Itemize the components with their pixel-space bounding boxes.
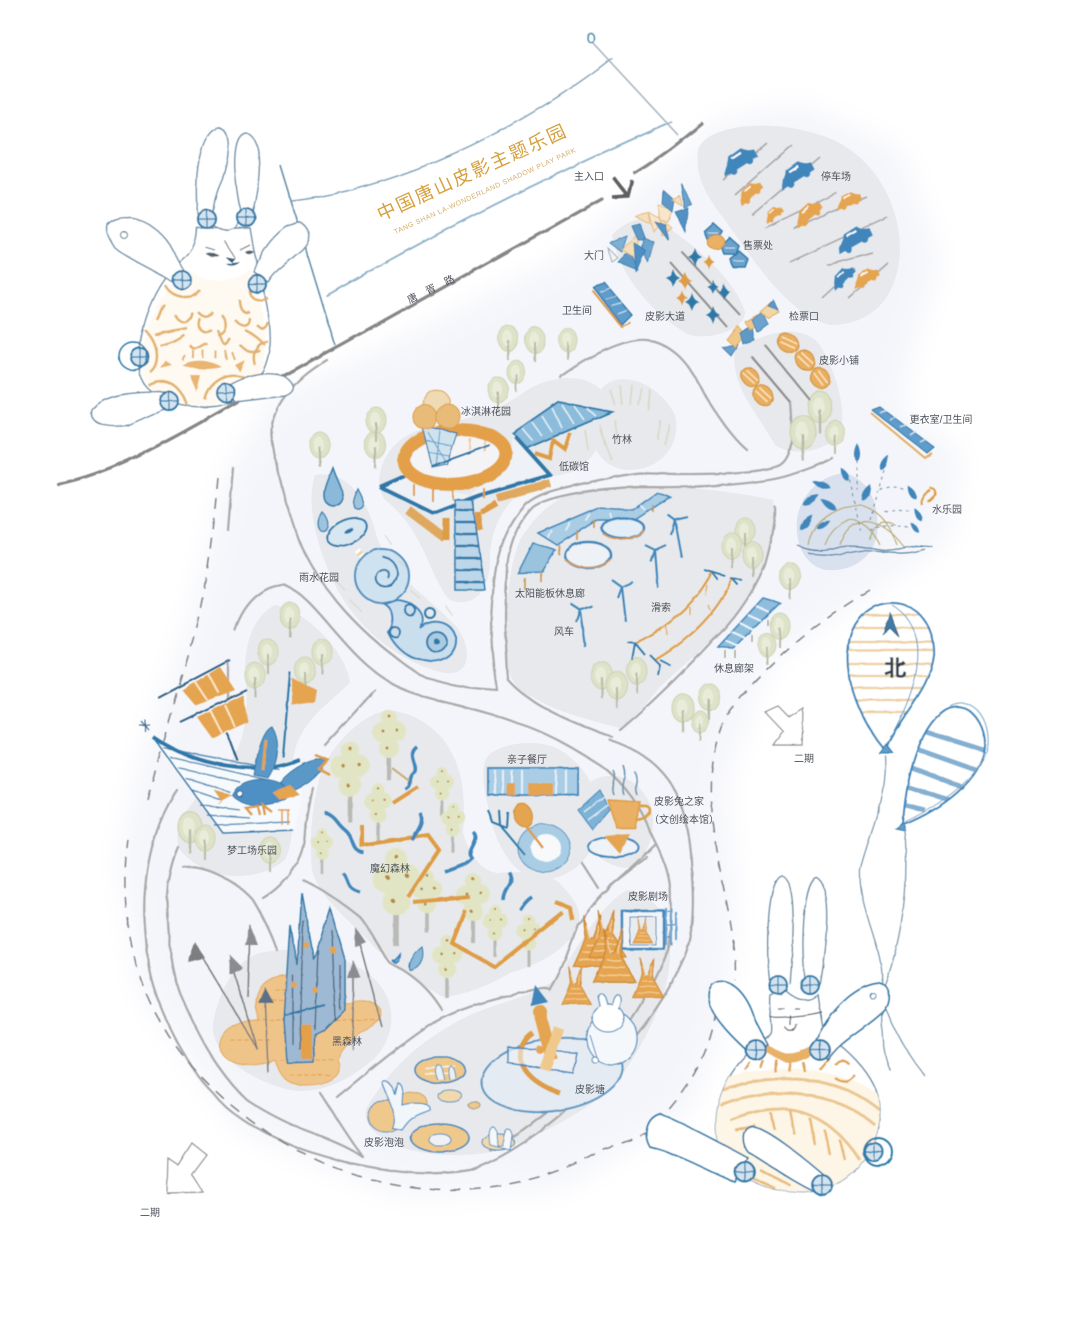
arms bbox=[709, 981, 768, 1055]
icon: rest pavilion bbox=[718, 598, 780, 658]
orange trail bbox=[362, 787, 572, 967]
zone: bubble pond bbox=[366, 890, 670, 1155]
balloon: north compass bbox=[840, 603, 940, 753]
arms bbox=[107, 218, 188, 282]
icon: souvenir shops bbox=[737, 330, 833, 409]
phase-two dashed boundary bbox=[125, 478, 870, 1190]
icon: toilet block bbox=[593, 282, 632, 327]
orange bunnies bbox=[573, 915, 614, 966]
label: souvenir shop: 皮影小铺 bbox=[819, 354, 859, 367]
icon: family restaurant bbox=[488, 768, 578, 872]
legs bbox=[646, 1114, 748, 1182]
joints bbox=[198, 210, 216, 228]
zone: bunny home bbox=[581, 776, 653, 868]
stairs bbox=[455, 500, 485, 590]
icon: bamboo grove bbox=[585, 385, 670, 460]
body bbox=[139, 228, 270, 407]
joints bbox=[769, 976, 787, 994]
label: water park: 水乐园 bbox=[932, 504, 962, 516]
balloon: striped bbox=[896, 703, 990, 831]
label: pavilion: 休息廊架 bbox=[714, 662, 754, 675]
rabbit top-left bbox=[92, 128, 309, 426]
face bbox=[205, 240, 250, 258]
scoops bbox=[424, 390, 450, 416]
main road bbox=[58, 124, 702, 484]
pale park ground bbox=[120, 105, 960, 1195]
label: toilet: 卫生间 bbox=[562, 304, 592, 317]
icon: main gate kites bbox=[608, 183, 692, 272]
icon: dark forest bbox=[188, 893, 382, 1085]
label: dark forest: 黑森林 bbox=[332, 1035, 362, 1048]
icon: main entrance arrow bbox=[612, 177, 632, 197]
label: phase two east: 二期 bbox=[794, 753, 814, 765]
ears bbox=[196, 128, 228, 222]
zone: solar bbox=[506, 486, 774, 728]
zone: bamboo bbox=[592, 379, 676, 470]
label: shadow avenue: 皮影大道 bbox=[645, 310, 685, 323]
balloon strings bbox=[860, 755, 925, 1076]
zone: water park bbox=[797, 473, 878, 570]
cone bbox=[422, 425, 457, 467]
zone: restaurant bbox=[483, 743, 600, 880]
icon: magic forest bbox=[311, 710, 572, 998]
road name: 唐胥路 bbox=[405, 268, 466, 306]
label: ice cream garden: 冰淇淋花园 bbox=[461, 405, 511, 418]
zone: avenue bbox=[612, 218, 745, 336]
legs bbox=[92, 392, 170, 426]
icon: changing room bbox=[871, 407, 934, 458]
label: solar gallery: 太阳能板休息廊 bbox=[515, 587, 585, 600]
pond bunny bbox=[587, 1011, 637, 1065]
icon: water park bbox=[797, 443, 935, 555]
zone: parking bbox=[697, 126, 900, 325]
icon: solar benches bbox=[518, 493, 670, 590]
label: windmill: 风车 bbox=[554, 625, 574, 638]
label: shadow pond: 皮影塘 bbox=[575, 1083, 605, 1096]
icon: bunny home teacup bbox=[578, 765, 650, 857]
label: ticket office: 售票处 bbox=[743, 239, 773, 252]
orange W sculpture bbox=[535, 433, 570, 458]
rabbit bottom-right bbox=[646, 876, 892, 1200]
label: main entrance: 主入口 bbox=[574, 171, 604, 183]
icon: zipline bbox=[627, 570, 742, 675]
body bbox=[716, 990, 880, 1192]
fork bbox=[488, 810, 525, 855]
ornaments bbox=[145, 280, 268, 405]
icon: ticket check gate bbox=[722, 300, 779, 356]
label: picture book hall: （文创绘本馆） bbox=[649, 813, 719, 826]
label: parking: 停车场 bbox=[821, 170, 851, 183]
icon: shadow theatre bbox=[561, 908, 676, 1004]
face bbox=[770, 1009, 822, 1030]
label: low carbon hall: 低碳馆 bbox=[559, 460, 589, 473]
icon: shadow avenue stars bbox=[666, 248, 740, 327]
icon: ice cream garden bbox=[380, 390, 612, 590]
arrow: phase two south-west bbox=[167, 1143, 207, 1193]
label: rain garden: 雨水花园 bbox=[299, 571, 339, 584]
label: shadow bubbles: 皮影泡泡 bbox=[364, 1136, 404, 1149]
title: park name: 中国唐山皮影主题乐园 bbox=[374, 120, 571, 225]
grey zone blobs bbox=[177, 126, 900, 1155]
label: bunny home: 皮影兔之家 bbox=[654, 795, 704, 808]
label: restaurant: 亲子餐厅 bbox=[507, 753, 547, 766]
zone: magic forest bbox=[311, 710, 579, 997]
label: zipline: 滑索 bbox=[651, 601, 671, 614]
zone: shops bbox=[734, 332, 842, 452]
zone: low carbon hall bbox=[379, 378, 607, 602]
label: changing room: 更衣室/卫生间 bbox=[910, 413, 972, 426]
label: phase two south: 二期 bbox=[140, 1207, 160, 1219]
ears bbox=[768, 876, 793, 985]
zone: dream works bbox=[177, 605, 350, 876]
label: main gate: 大门 bbox=[584, 249, 604, 262]
subtitle: english name: TANG SHAN LA-WONDERLAND SHADOW PLAY PARK bbox=[393, 147, 577, 236]
icon: wind turbines bbox=[570, 515, 688, 647]
arrow: phase two east bbox=[765, 706, 803, 745]
trees bbox=[178, 325, 844, 872]
icon: ticket booths bbox=[704, 223, 748, 267]
ring bbox=[402, 426, 508, 488]
banner: park name bbox=[280, 34, 678, 345]
label: ticket check: 检票口 bbox=[789, 310, 819, 323]
icon: shadow pond bbox=[477, 985, 637, 1121]
icon: rain garden bbox=[318, 468, 456, 661]
park paths bbox=[144, 340, 832, 1173]
castle bbox=[284, 893, 345, 1063]
label: dream works: 梦工场乐园 bbox=[227, 844, 277, 857]
orange walls bbox=[408, 510, 445, 538]
label: bamboo: 竹林 bbox=[612, 433, 632, 446]
icon: bubble craters bbox=[368, 1057, 514, 1152]
icon: dream ship bbox=[139, 660, 330, 833]
stilts bbox=[414, 438, 485, 502]
platform bbox=[380, 434, 550, 515]
zone: rain garden bbox=[312, 474, 467, 673]
zone: dark forest bbox=[213, 950, 391, 1091]
plate bbox=[518, 824, 570, 872]
flying fish bbox=[232, 779, 288, 805]
icon: parking lot bbox=[717, 143, 888, 298]
spears bbox=[195, 925, 382, 1073]
low carbon bridge bbox=[513, 402, 612, 448]
label: shadow theatre: 皮影剧场 bbox=[628, 890, 668, 903]
balloon: north compass: 北 bbox=[884, 656, 906, 681]
blue wiggles bbox=[405, 747, 417, 789]
spoon bbox=[510, 801, 536, 829]
label: magic forest: 魔幻森林 bbox=[370, 862, 410, 875]
